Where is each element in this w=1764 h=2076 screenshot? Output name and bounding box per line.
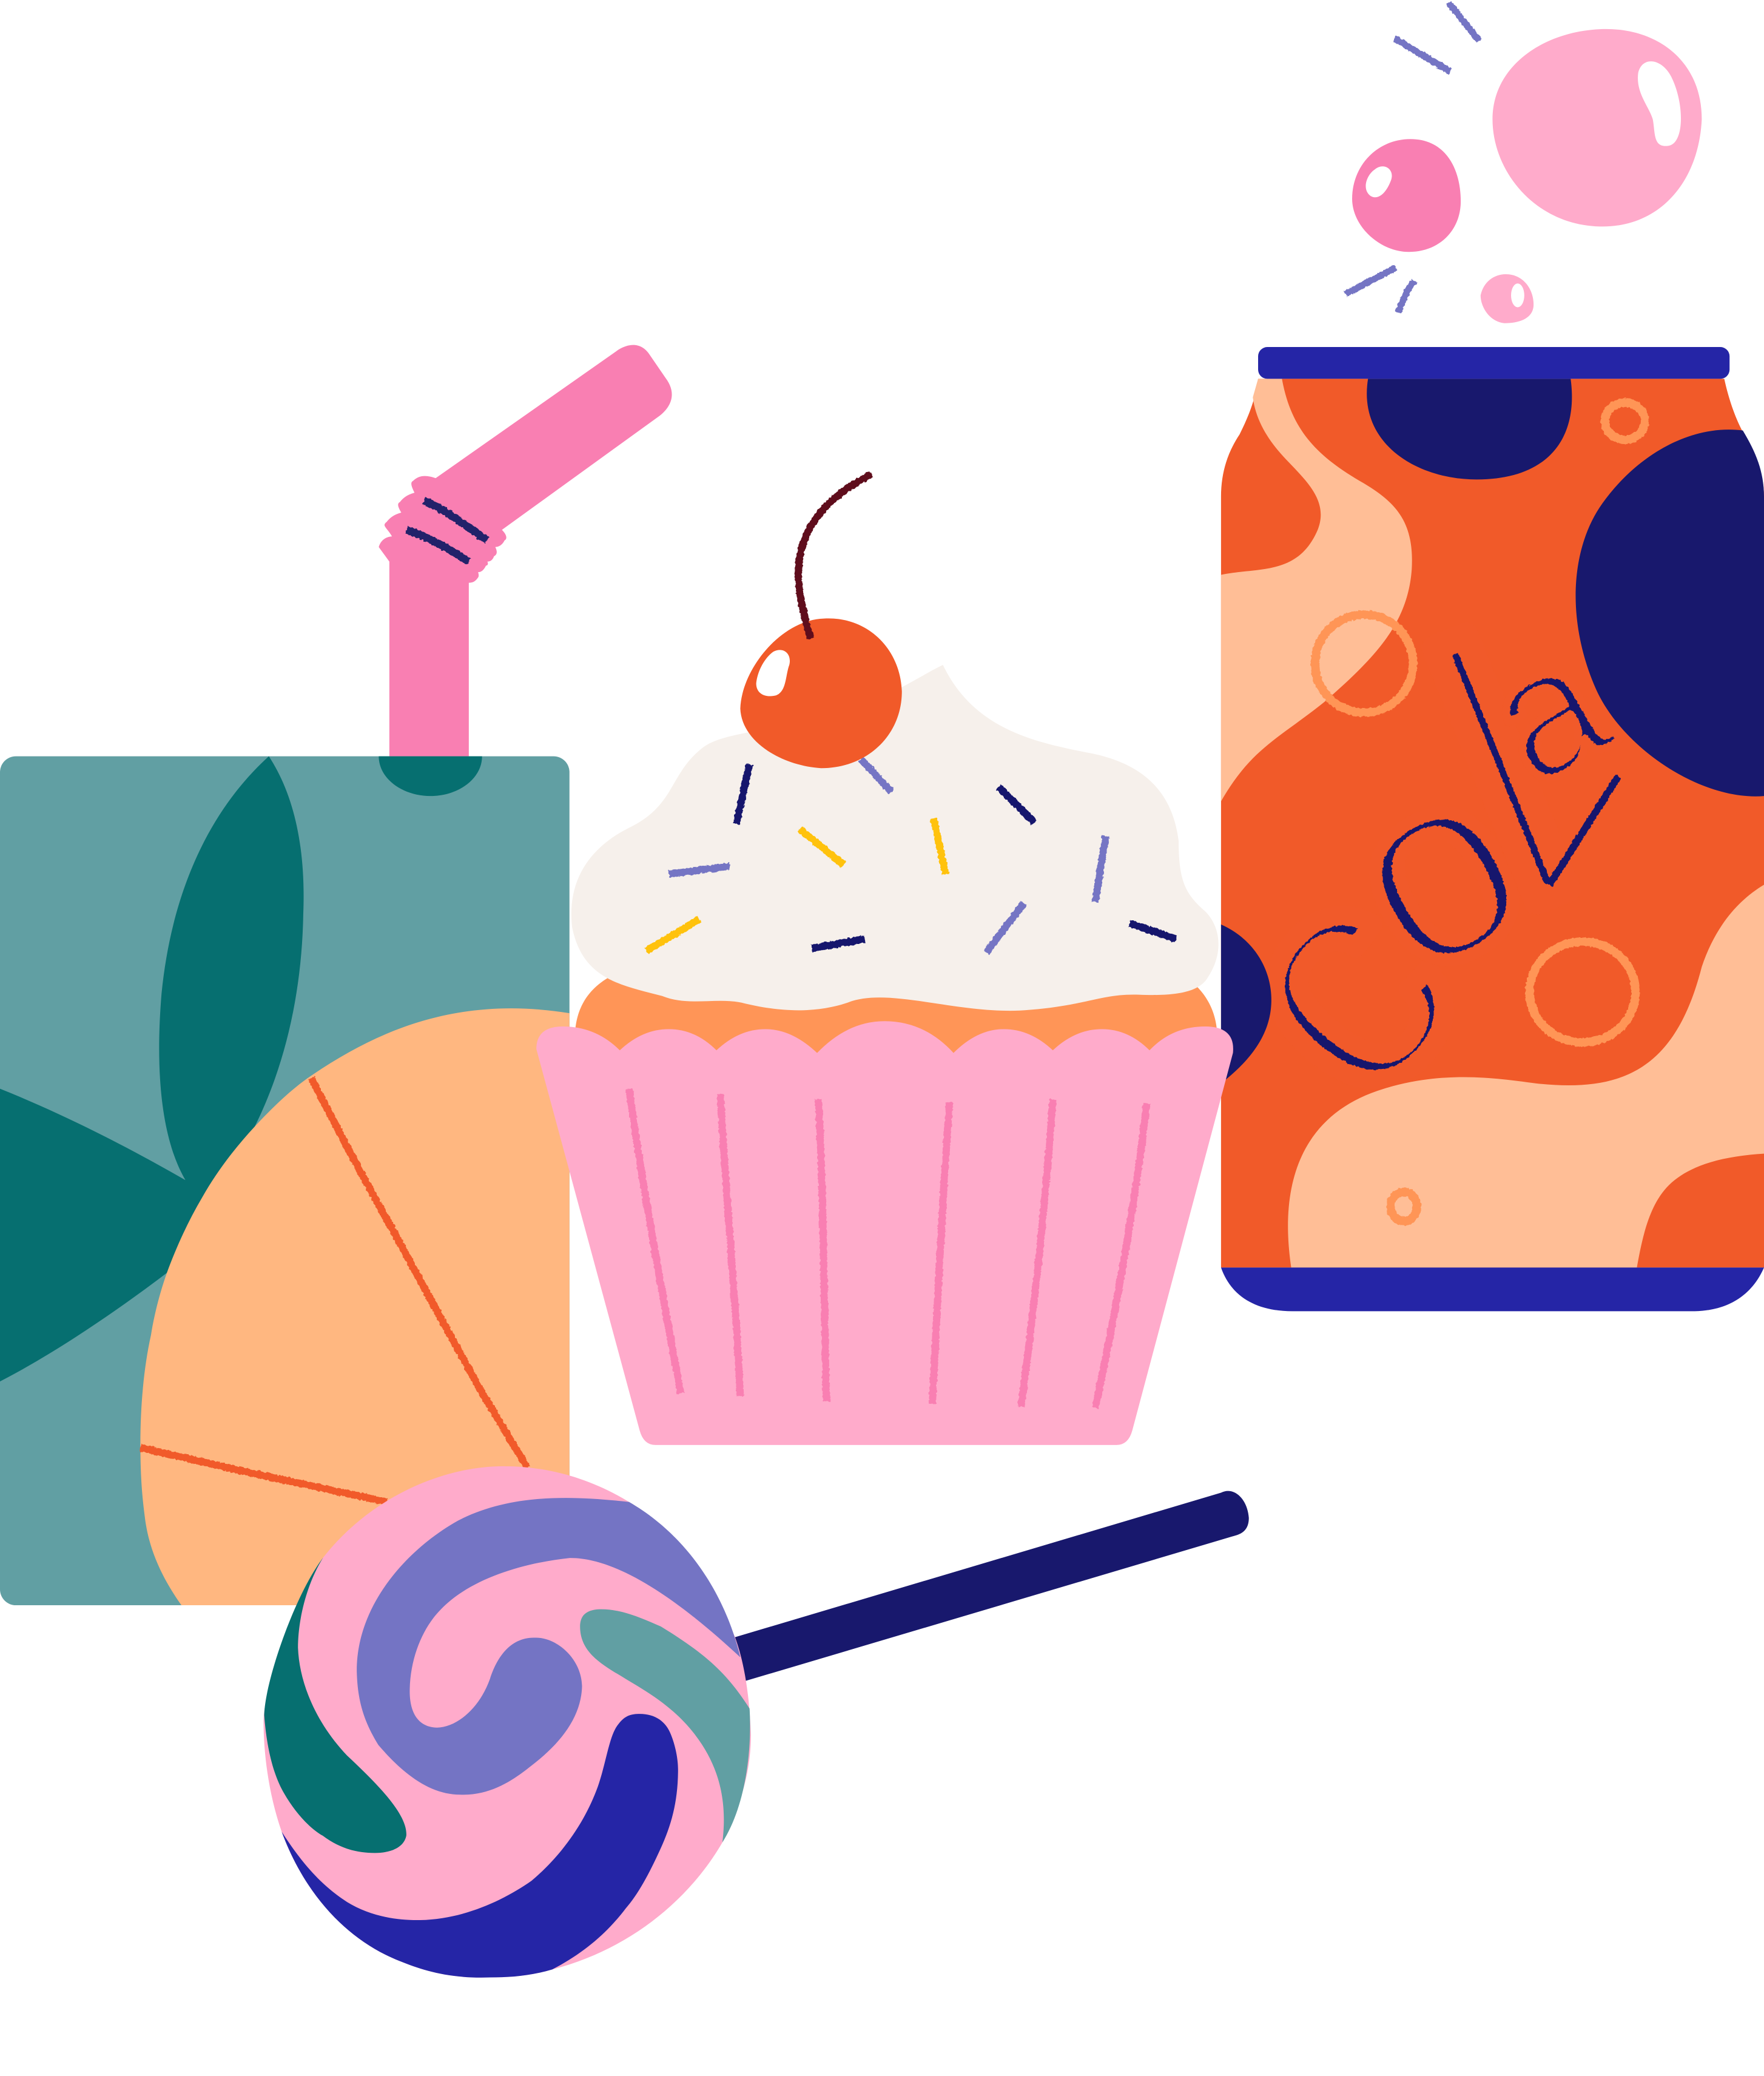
wrapper pleats [629, 1089, 1147, 1408]
dark teal swirl [264, 1557, 406, 1853]
orange slice segment lines [140, 1078, 527, 1502]
straw ridges [406, 500, 487, 562]
carton leaves [0, 757, 304, 1381]
straw hole [379, 757, 482, 796]
cola lettering: a [1453, 599, 1640, 823]
juice box [0, 345, 672, 1605]
can pattern navy [1221, 379, 1764, 1083]
carton body [0, 757, 570, 1605]
candy base [263, 1466, 751, 1978]
medium bubble highlight [1365, 166, 1392, 197]
teal swirl [580, 1609, 750, 1842]
large bubble highlight [1638, 61, 1681, 146]
cola lettering: l [1385, 563, 1621, 985]
blue swirl [281, 1714, 678, 1978]
cola lettering: o [1296, 703, 1572, 1033]
orange slice [140, 1008, 570, 1605]
sprinkles [646, 759, 1176, 952]
cupcake wrapper [536, 1021, 1233, 1445]
small bubble highlight [1511, 283, 1524, 308]
lollipop stick [731, 1491, 1249, 1682]
periwinkle swirl [357, 1498, 740, 1795]
lettering flourish [1549, 776, 1618, 885]
cola lettering: c [1150, 811, 1524, 1160]
frosting [571, 665, 1219, 1011]
can body [1221, 379, 1764, 1267]
lollipop candy [263, 1466, 751, 1978]
fizz dashes [1345, 2, 1480, 312]
cherry [740, 618, 902, 768]
can base [1221, 1267, 1764, 1311]
straw [379, 345, 672, 757]
can rings [1315, 403, 1645, 1221]
can lid [1258, 347, 1729, 379]
cherry stem [798, 474, 872, 638]
lollipop [263, 1466, 1249, 1978]
soda can [1150, 347, 1764, 1311]
medium bubble [1352, 139, 1461, 252]
large bubble [1492, 29, 1702, 226]
cherry highlight [756, 650, 790, 696]
can pattern peach [1221, 379, 1764, 1267]
small bubble [1481, 274, 1533, 323]
cupcake [536, 474, 1233, 1445]
soda bubbles [1345, 2, 1702, 323]
cake dome [575, 974, 1217, 1060]
